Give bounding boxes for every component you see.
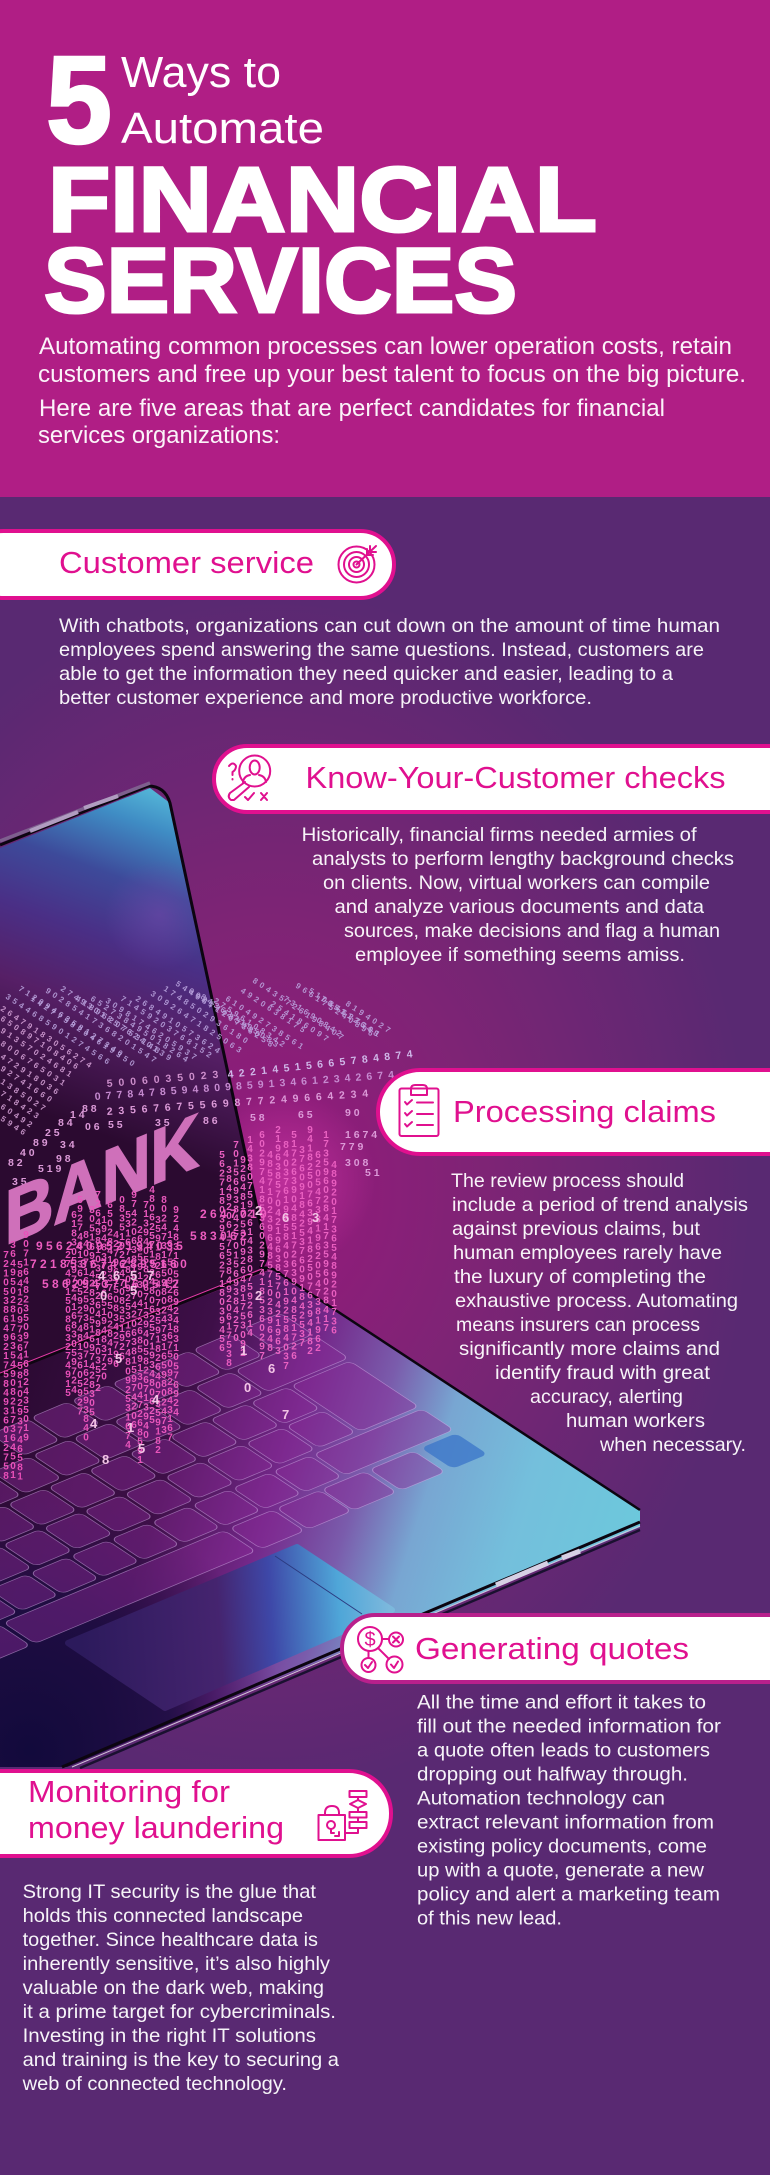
digits: falling columns: 30516974283051697428305 xyxy=(86,1205,98,1417)
intro text: Here are five areas that are perfect candidates for financial xyxy=(39,395,665,422)
digits: falling columns: 7210538649217584936012758 xyxy=(0,1250,12,1480)
icon: target xyxy=(338,546,376,582)
digits: cube front rows xyxy=(8,1048,413,1188)
digits: cube front rows: 3 5 xyxy=(155,1117,170,1129)
icon: lock and flowchart xyxy=(318,1791,366,1840)
body text: employee if something seems amiss. xyxy=(355,944,685,966)
body text: sources, make decisions and flag a human xyxy=(344,920,720,942)
digits: falling columns: 2749150863274915 xyxy=(62,1250,74,1397)
digits: cube top face: 4189620753148 xyxy=(74,994,164,1057)
digits: falling columns: 16750928431675092843167 xyxy=(164,1230,176,1442)
digits: cube front rows: 8 6 xyxy=(203,1115,218,1127)
body text: inherently sensitive, it’s also highly xyxy=(23,1953,330,1975)
digits: falling columns: 5627180394562718039456 xyxy=(216,1150,228,1352)
body text: holds this connected landscape xyxy=(23,1905,303,1927)
digits: falling columns: 9264817530926481753092 xyxy=(238,1155,248,1357)
body text: together. Since healthcare data is xyxy=(23,1929,318,1951)
digits: falling columns: 8403761925840376192584037 xyxy=(280,1140,292,1370)
BANK lettering: BANK xyxy=(5,1096,199,1261)
body text: human employees rarely have xyxy=(453,1242,722,1264)
hinge xyxy=(0,1269,267,1375)
body text: human workers xyxy=(566,1410,705,1432)
digits: cube front rows: 2 5 xyxy=(45,1127,60,1139)
digits: cube front rows: 5 5 xyxy=(108,1119,123,1131)
digits: cube front rows: 1 6 7 4 xyxy=(345,1129,377,1141)
digits: cube front rows: 7 7 9 xyxy=(340,1141,364,1153)
digits: scattered head of columns: 9 5 6 2 4 0 9 5 2 1 9 4 0 3 5 xyxy=(36,1239,183,1253)
digits: cube top face: 26479183056274 xyxy=(0,1004,96,1072)
digits: falling columns: 4857102396485710239648 xyxy=(264,1150,276,1352)
title: FINANCIAL xyxy=(48,149,597,251)
digits: cube front rows: 9 8 xyxy=(56,1153,71,1165)
digits: cube top face: 71459203768152 xyxy=(119,994,216,1062)
digits: cube top face: 60217485930 xyxy=(187,986,264,1041)
body text: it a prime target for cybercriminals. xyxy=(23,2001,336,2023)
digits: cube front rows: 5 1 9 xyxy=(38,1163,62,1175)
title: 5 xyxy=(46,32,112,170)
digits: falling columns: 35918264073591826407359182 xyxy=(152,1215,164,1454)
body text: a quote often leads to customers xyxy=(417,1740,710,1762)
pill heading xyxy=(214,746,770,812)
digits: falling columns: 427961508342796 xyxy=(110,1230,122,1368)
digits: falling columns: 7264981035726498103572 xyxy=(92,1190,104,1392)
body text: fill out the needed information for xyxy=(417,1716,722,1738)
body text: means insurers can process xyxy=(456,1314,700,1336)
digits: cube top face: 652738495018264 xyxy=(89,994,193,1066)
digits: cube top face: 51084627391 xyxy=(307,986,384,1041)
body text: policy and alert a marketing team xyxy=(417,1884,720,1906)
icon: dollar network: $ xyxy=(364,1629,376,1651)
digits: scattered head of columns: 5 8 3 0 6 2 xyxy=(190,1229,247,1243)
pill heading: Generating quotes xyxy=(415,1631,689,1666)
digits: large highlights: 3 xyxy=(312,1210,319,1225)
digits: falling columns: 9418250763941825076394182 xyxy=(304,1125,316,1355)
body text: employees spend answering the same questions. Instead, customers are xyxy=(59,639,704,661)
digits: falling columns: 6029741853602974185360297 xyxy=(256,1130,268,1360)
digits: scattered head of columns: 7 2 1 8 5 3 6 7 4 2 8 9 5 1 6 0 xyxy=(30,1257,187,1271)
digits: cube front rows: 8 8 xyxy=(82,1103,97,1115)
body text: against previous claims, but xyxy=(452,1218,701,1240)
digits: cube front rows: 6 5 xyxy=(298,1109,313,1121)
digits: cube top face: 472918036 xyxy=(0,1052,63,1098)
digits: cube top face: 91357024681 xyxy=(0,1026,76,1081)
digits: cube top face: 90285417368201547 xyxy=(44,986,161,1066)
digits: cube front rows: 3 4 xyxy=(60,1139,75,1151)
digits: cube top face: 80435726198407 xyxy=(251,976,348,1044)
digits: scattered head of columns: 2 6 4 7 0 1 9 xyxy=(200,1207,267,1221)
digits: large highlights: 6 xyxy=(268,1361,275,1376)
body text xyxy=(451,1170,748,1456)
icon: dollar network xyxy=(358,1627,403,1672)
digits: cube top face: 610492738561 xyxy=(224,994,308,1053)
pill heading: money laundering xyxy=(28,1810,284,1845)
body text: accuracy, alerting xyxy=(530,1386,683,1408)
digits: cube top face: 731690842 xyxy=(282,994,346,1040)
digits: large highlights: 5 xyxy=(138,1441,145,1456)
deck edges xyxy=(62,1268,640,1768)
pill heading xyxy=(0,1771,391,1856)
digits: cube top face: 92741660 xyxy=(0,1064,56,1106)
body text: Strong IT security is the glue that xyxy=(23,1881,317,1903)
digits: falling columns: 71394058267139405826713940 xyxy=(140,1200,152,1439)
body text: when necessary. xyxy=(599,1434,746,1456)
digits: cube top face: 7120946358127340 xyxy=(17,984,127,1060)
body text: Automation technology can xyxy=(417,1788,665,1810)
digits: large highlights: 2 xyxy=(255,1288,262,1303)
digits: falling columns: 36495028176354908217364501 xyxy=(8,1240,18,1479)
digits: cube top face: 60492 xyxy=(0,1102,37,1131)
body text: All the time and effort it takes to xyxy=(417,1692,706,1714)
digits: falling columns: 1438075926143807592614 xyxy=(244,1135,256,1337)
icon: clipboard xyxy=(400,1085,438,1136)
digits: cube front rows: 9 0 xyxy=(345,1107,360,1119)
digits: falling columns: 80247316598024731659802473 xyxy=(158,1195,170,1434)
digits: cube front rows: 5 1 xyxy=(365,1167,380,1179)
digits: large highlights: 5 xyxy=(130,1268,137,1283)
digits: cube front rows: 2 3 5 6 7 6 7 5 5 6 9 8 7 7 2 4 9 6 6 4 2 3 4 xyxy=(106,1088,369,1118)
digits: cube front rows: 8 9 xyxy=(33,1137,48,1149)
pill heading xyxy=(0,531,394,598)
body text: include a period of trend analysis xyxy=(452,1194,748,1216)
digits: cube top face: 718423 xyxy=(0,1089,43,1122)
intro text: customers and free up your best talent to focus on the big picture. xyxy=(38,361,746,388)
digits: cube front rows: 0 6 xyxy=(85,1121,100,1133)
icon: magnifier with person xyxy=(229,756,270,800)
body text xyxy=(22,1881,339,2095)
pill heading: Know-Your-Customer checks xyxy=(306,760,726,795)
digits: falling columns: 26859130472685913047268591 xyxy=(134,1225,146,1464)
body text xyxy=(417,1692,722,1930)
body text: identify fraud with great xyxy=(495,1362,711,1384)
pill heading: Customer service xyxy=(59,545,314,580)
digits: cube top face: 4920638175 xyxy=(239,986,310,1036)
panel: generating quotes xyxy=(342,1615,770,1930)
body text: exhaustive process. Automating xyxy=(455,1290,738,1312)
digits: large highlights: 4 xyxy=(152,1392,160,1407)
digits: falling columns: 84071625938407162593840 xyxy=(80,1230,92,1442)
digits: cube top face: 27493018576240139 xyxy=(59,984,176,1064)
body text: up with a quote, generate a new xyxy=(417,1860,705,1882)
digits: cube top face: 650897108406 xyxy=(0,1014,83,1073)
intro text xyxy=(38,333,746,449)
body text: Investing in the right IT solutions xyxy=(23,2025,316,2047)
title: Ways to xyxy=(121,48,281,97)
digits: large highlights: 8 xyxy=(102,1452,109,1467)
digits: cube top face: 27596108342 xyxy=(212,996,289,1051)
digits: large highlights: 5 xyxy=(115,1351,122,1366)
digits: cube top face: 705312648 xyxy=(319,994,383,1040)
digits: cube front rows: 5 0 0 6 0 3 5 0 2 3 xyxy=(106,1069,219,1090)
digits: cube top face: 1748502936180 xyxy=(162,984,252,1047)
digits: cube front rows: 5 8 xyxy=(250,1112,265,1124)
digits: falling columns: 92483105769248310576924 xyxy=(170,1205,182,1417)
title: SERVICES xyxy=(44,230,517,332)
digits: falling columns: 4892017365489201736 xyxy=(328,1160,340,1335)
body text: extract relevant information from xyxy=(417,1812,714,1834)
digits: cube top face xyxy=(0,976,395,1139)
digits: cube top face: 8194027 xyxy=(344,999,395,1037)
digits: scattered head of columns: 5 8 6 2 9 4 3 7 1 6 0 5 4 2 xyxy=(42,1277,179,1291)
body text: Historically, financial firms needed armies of xyxy=(302,824,697,846)
body text: and analyze various documents and data xyxy=(334,896,704,918)
body text: With chatbots, organizations can cut down on the amount of time human xyxy=(59,615,720,637)
digits: falling columns: 592748136059274813605927 xyxy=(74,1195,86,1416)
digits: falling columns: 6205473819620547381962 xyxy=(312,1150,324,1352)
digits: cube front rows: 4 0 xyxy=(20,1147,35,1159)
pill heading: Processing claims xyxy=(453,1094,716,1129)
digits: falling columns: 3849206175384920617538 xyxy=(224,1165,234,1367)
digits: cube top face: 254186097 xyxy=(269,999,333,1045)
digits: large highlights: 5 xyxy=(130,1283,137,1298)
body text: dropping out halfway through. xyxy=(417,1764,688,1786)
body text: the luxury of completing the xyxy=(454,1266,706,1288)
digits: cube top face: 2684910573624 xyxy=(134,994,224,1057)
body text: The review process should xyxy=(451,1170,684,1192)
body text: analysts to perform lengthy background checks xyxy=(312,848,734,870)
body text: valuable on the dark web, making xyxy=(23,1977,324,1999)
digits: falling columns: 083519264708351926 xyxy=(116,1195,128,1361)
digits: cube front rows: 8 4 xyxy=(58,1117,73,1129)
body text: on clients. Now, virtual workers can compile xyxy=(323,872,710,894)
digits: cube top face: 3544685901274566 xyxy=(4,992,114,1068)
digits: falling columns xyxy=(0,1125,340,1481)
digits: falling columns: 7015693842701569384270 xyxy=(230,1140,242,1342)
keyboard keys xyxy=(0,1313,491,1668)
digits: large highlights: 7 xyxy=(147,1268,154,1283)
digits: cube top face: 30926471825063 xyxy=(149,989,246,1057)
digits: cube top face: 1385027 xyxy=(0,1077,50,1115)
body text: better customer experience and more productive workforce. xyxy=(59,687,592,709)
digits: large highlights: 1 xyxy=(240,1343,247,1358)
digits: scattered head of columns xyxy=(30,1207,267,1291)
pill heading xyxy=(378,1070,770,1154)
digits: falling columns: 650284193765028419 xyxy=(104,1200,116,1366)
digits: large highlights: 6 xyxy=(113,1268,120,1283)
digits: large highlights: 7 xyxy=(282,1407,289,1422)
digits: cube front rows: 4 2 2 1 4 5 1 5 6 6 5 7 8 4 8 7 4 xyxy=(227,1048,413,1081)
title xyxy=(44,32,597,332)
trackpad xyxy=(68,1547,392,1708)
digits: falling columns: 2196385704219638570421963 xyxy=(272,1125,284,1355)
digits: falling columns: 194837206519483720 xyxy=(98,1215,110,1381)
digits: cube top face: 30981746205937 xyxy=(104,996,201,1064)
digits: falling columns: 48062571934806257193480625 xyxy=(146,1185,158,1424)
body text xyxy=(302,824,734,966)
digits: cube front rows: 1 4 xyxy=(70,1109,85,1121)
digits: large highlights xyxy=(90,1203,319,1467)
digits: large highlights: 4 xyxy=(90,1416,98,1431)
intro text: services organizations: xyxy=(38,422,280,449)
digits: cube front rows: 8 2 xyxy=(8,1157,23,1169)
digits: cube top face: 544987120736258 xyxy=(174,979,278,1051)
digits: falling columns: 90716482350971682435019 xyxy=(20,1230,32,1442)
panel: processing claims xyxy=(378,1070,770,1456)
title: Automate xyxy=(121,104,324,153)
digits: cube front rows: 0 7 7 8 4 7 8 5 9 4 8 0 9 8 5 9 1 3 4 6 1 2 3 4 2 6 7 4 xyxy=(94,1069,395,1103)
digits: large highlights: 1 xyxy=(127,1420,134,1435)
panel: monitoring for money laundering xyxy=(0,1771,391,2095)
panel: customer service xyxy=(0,531,720,709)
digits: large highlights: 0 xyxy=(100,1288,107,1303)
digits: falling columns: 1735960284173596028417 xyxy=(320,1130,332,1332)
digits: falling columns: 97420638159742063815974206 xyxy=(128,1190,140,1429)
body text: of this new lead. xyxy=(417,1908,562,1930)
digits: cube top face: 1427758204619350 xyxy=(29,994,139,1070)
laptop keyboard deck xyxy=(0,1267,640,1768)
panel: know-your-customer checks xyxy=(214,746,770,966)
digits: falling columns: 61830597241683059724 xyxy=(68,1210,80,1394)
digits: falling columns: 584120973645810293746581 xyxy=(14,1260,26,1481)
digits: large highlights: 4 xyxy=(98,1268,106,1283)
body text: web of connected technology. xyxy=(22,2073,287,2095)
pill heading xyxy=(342,1615,770,1682)
digits: large highlights: 2 xyxy=(255,1203,262,1218)
body text: able to get the information they need quicker and easier, leading to a xyxy=(59,663,673,685)
laptop screen xyxy=(0,783,267,1375)
digits: falling columns: 3760918425376091842537 xyxy=(296,1145,308,1347)
pill heading: Monitoring for xyxy=(28,1774,230,1809)
header panel xyxy=(0,0,770,497)
digits: cube top face: 8006765031 xyxy=(0,1039,70,1089)
digits: cube front rows: 3 5 xyxy=(12,1176,27,1188)
laptop illustration xyxy=(0,783,640,1768)
digits: cube front rows: 3 0 8 xyxy=(345,1157,369,1169)
body text: and training is the key to securing a xyxy=(23,2049,339,2071)
digits: falling columns: 5172639048517263904851726 xyxy=(288,1130,300,1360)
body text: significantly more claims and xyxy=(459,1338,720,1360)
body text xyxy=(59,615,720,709)
digits: falling columns: 53167480925316748092531674 xyxy=(122,1210,134,1449)
intro text: Automating common processes can lower operation costs, retain xyxy=(39,333,732,360)
digits: cube top face: 843627195083 xyxy=(199,992,283,1051)
digits: cube top face: 966175240896 xyxy=(294,981,378,1040)
digits: large highlights: 0 xyxy=(244,1380,251,1395)
digits: large highlights: 6 xyxy=(282,1210,289,1225)
body text: existing policy documents, come xyxy=(417,1836,707,1858)
